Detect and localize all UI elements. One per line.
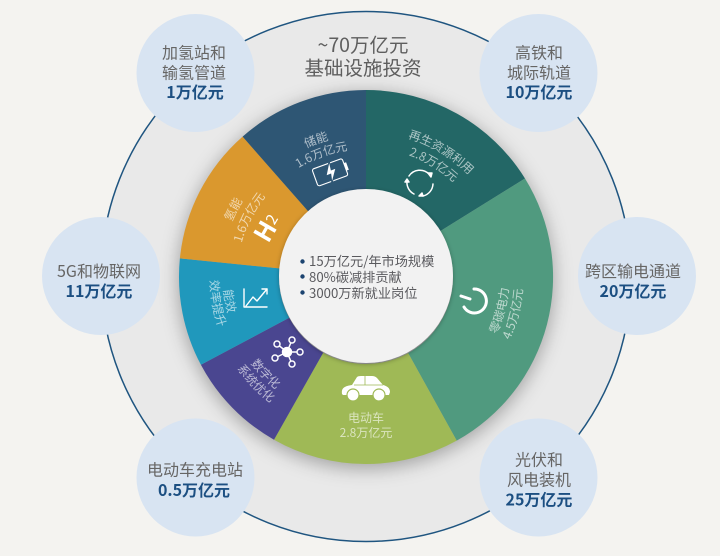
segment: 数字化系统优化: [201, 318, 324, 440]
center text: 80%碳减排贡献: [309, 267, 402, 286]
icon: recycle: [405, 170, 433, 196]
bubble: 高铁和城际轨道: 城际轨道: [507, 60, 571, 84]
bubble: 光伏和风电装机: 风电装机: [507, 466, 571, 490]
title: 基础设施投资: [304, 52, 422, 81]
bubble: 跨区输电通道: [578, 217, 696, 335]
icon: car: [342, 376, 390, 401]
segment: 再生资源利用: 2.8万亿元: [409, 148, 458, 182]
bubble: 跨区输电通道: 20万亿元: [600, 278, 666, 302]
bubble: 加氢站和输氢管道: 1万亿元: [166, 79, 224, 103]
center text: [300, 251, 434, 302]
icon: H2: H: [244, 214, 285, 248]
bubble: 电动车充电站: 0.5万亿元: [158, 477, 230, 501]
bubble: 加氢站和输氢管道: [136, 14, 254, 132]
bubble: 光伏和风电装机: [480, 418, 598, 536]
center text: 15万亿元/年市场规模: [309, 251, 434, 270]
bubble: 电动车充电站: 电动车充电站: [147, 456, 243, 480]
icon: network: [272, 337, 303, 367]
donut shadow: [178, 93, 554, 469]
bubble: 加氢站和输氢管道: 加氢站和: [162, 40, 226, 64]
center circle: [279, 189, 453, 363]
segment: 能效: [178, 258, 290, 365]
icon: chart: [244, 289, 267, 307]
segment: 氢能: [180, 136, 308, 268]
segment: 数字化系统优化: 数字化: [250, 358, 280, 389]
bubble: 光伏和风电装机: 25万亿元: [506, 486, 572, 510]
segment: 能效: 效率提升: [209, 280, 227, 326]
bubble: 跨区输电通道: 跨区输电通道: [585, 258, 681, 282]
segment: 储能: 1.6万亿元: [296, 142, 348, 168]
bubble: 高铁和城际轨道: 10万亿元: [506, 79, 572, 103]
icon: power: [461, 289, 486, 313]
bubble: 高铁和城际轨道: [480, 14, 598, 132]
segment: 数字化系统优化: 系统优化: [238, 364, 275, 402]
center text: 3000万新就业岗位: [309, 283, 417, 302]
bubble: 5G和物联网: [42, 217, 160, 335]
bubble: 电动车充电站: [136, 418, 254, 536]
outer ring: [101, 12, 631, 542]
segment: 电动车: 电动车: [348, 409, 384, 426]
segment: 储能: [242, 90, 366, 212]
bubble: 加氢站和输氢管道: 输氢管道: [162, 60, 226, 84]
segment: 再生资源利用: [366, 90, 525, 231]
segment: 储能: 储能: [304, 132, 328, 148]
icon: battery: [311, 156, 351, 188]
segment: 氢能: 1.6万亿元: [234, 192, 266, 242]
segment: 能效: 能效: [222, 290, 237, 314]
icon: H2: 2: [260, 210, 283, 228]
title: ~70万亿元: [318, 29, 408, 58]
bubble: 5G和物联网: 5G和物联网: [57, 258, 141, 282]
title: [304, 29, 422, 81]
donut chart: [178, 90, 554, 464]
segment: 零碳电力: [408, 178, 554, 440]
segment: 电动车: 2.8万亿元: [340, 424, 392, 441]
segment: 电动车: [274, 353, 457, 464]
segment: 氢能: 氢能: [224, 198, 243, 222]
segment: 零碳电力: 4.5万亿元: [503, 289, 524, 339]
segment: 零碳电力: 零碳电力: [488, 288, 510, 333]
bubble: 5G和物联网: 11万亿元: [66, 278, 132, 302]
bubble: 高铁和城际轨道: 高铁和: [515, 40, 563, 64]
segment: 再生资源利用: 再生资源利用: [409, 130, 474, 174]
bubble: 光伏和风电装机: 光伏和: [515, 446, 563, 470]
